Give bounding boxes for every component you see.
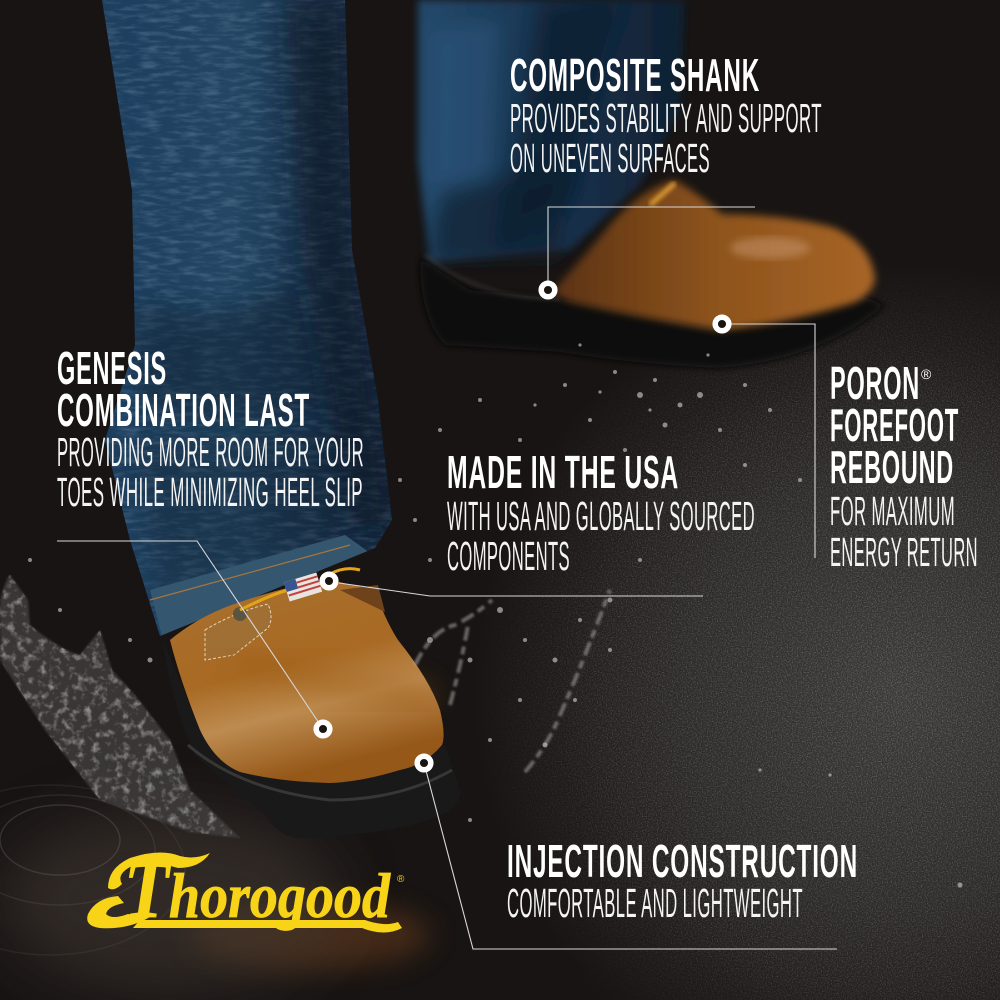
marker: made in the usa [322, 574, 336, 588]
text: PROVIDING MORE ROOM FOR YOUR [57, 429, 364, 475]
marker: composite shank [541, 283, 555, 297]
logo wordmark: Thorogood [124, 843, 391, 936]
yellow lace [240, 569, 360, 610]
rear boot sole [420, 258, 885, 368]
water droplets [28, 343, 962, 887]
eyelet [233, 607, 247, 621]
rear boot upper [552, 180, 875, 330]
jeans cuff [150, 535, 380, 636]
front boot sole [163, 640, 460, 838]
logo: Thorogood [87, 843, 405, 936]
leader: poron [722, 324, 815, 558]
front leg jeans [100, 0, 395, 640]
rear leg jeans [418, 0, 685, 262]
leader: composite shank [548, 207, 755, 290]
wet pavement background [0, 265, 1000, 1000]
front boot upper [170, 569, 444, 783]
heading: made in the usa: MADE IN THE USA [447, 446, 679, 498]
heading: genesis combination last: GENESIS [57, 342, 167, 394]
rear boot [420, 180, 885, 368]
callout: composite shank: ON UNEVEN SURFACES [510, 135, 710, 181]
logo underline bar [133, 920, 402, 932]
heading: genesis combination last: COMBINATION LAST [57, 384, 310, 436]
flag pin [284, 572, 322, 602]
leader: made in the usa [339, 583, 703, 596]
marker: poron [715, 317, 729, 331]
text: TOES WHILE MINIMIZING HEEL SLIP [57, 469, 363, 515]
logo top swash [108, 852, 210, 889]
callout: made in the usa [322, 446, 755, 596]
heading: composite shank: COMPOSITE SHANK [510, 49, 760, 101]
heading: genesis combination last [57, 342, 310, 436]
logo registered mark: ® [397, 874, 405, 885]
water splash [0, 570, 610, 840]
logo foot swash [87, 896, 150, 928]
callout: poron forefoot rebound [715, 317, 978, 575]
leader: genesis [57, 541, 323, 729]
marker: injection construction [417, 756, 431, 770]
marker: genesis [316, 722, 330, 736]
callout: genesis combination last [57, 342, 364, 736]
front boot sole stripe [188, 745, 452, 800]
heading: poron forefoot rebound [830, 357, 959, 493]
leader: injection construction [424, 763, 837, 949]
callout: composite shank [510, 49, 822, 297]
callout: injection construction [417, 756, 858, 949]
callout: made in the usa: COMPONENTS [447, 533, 570, 579]
heading: poron forefoot rebound: ® [921, 366, 932, 382]
